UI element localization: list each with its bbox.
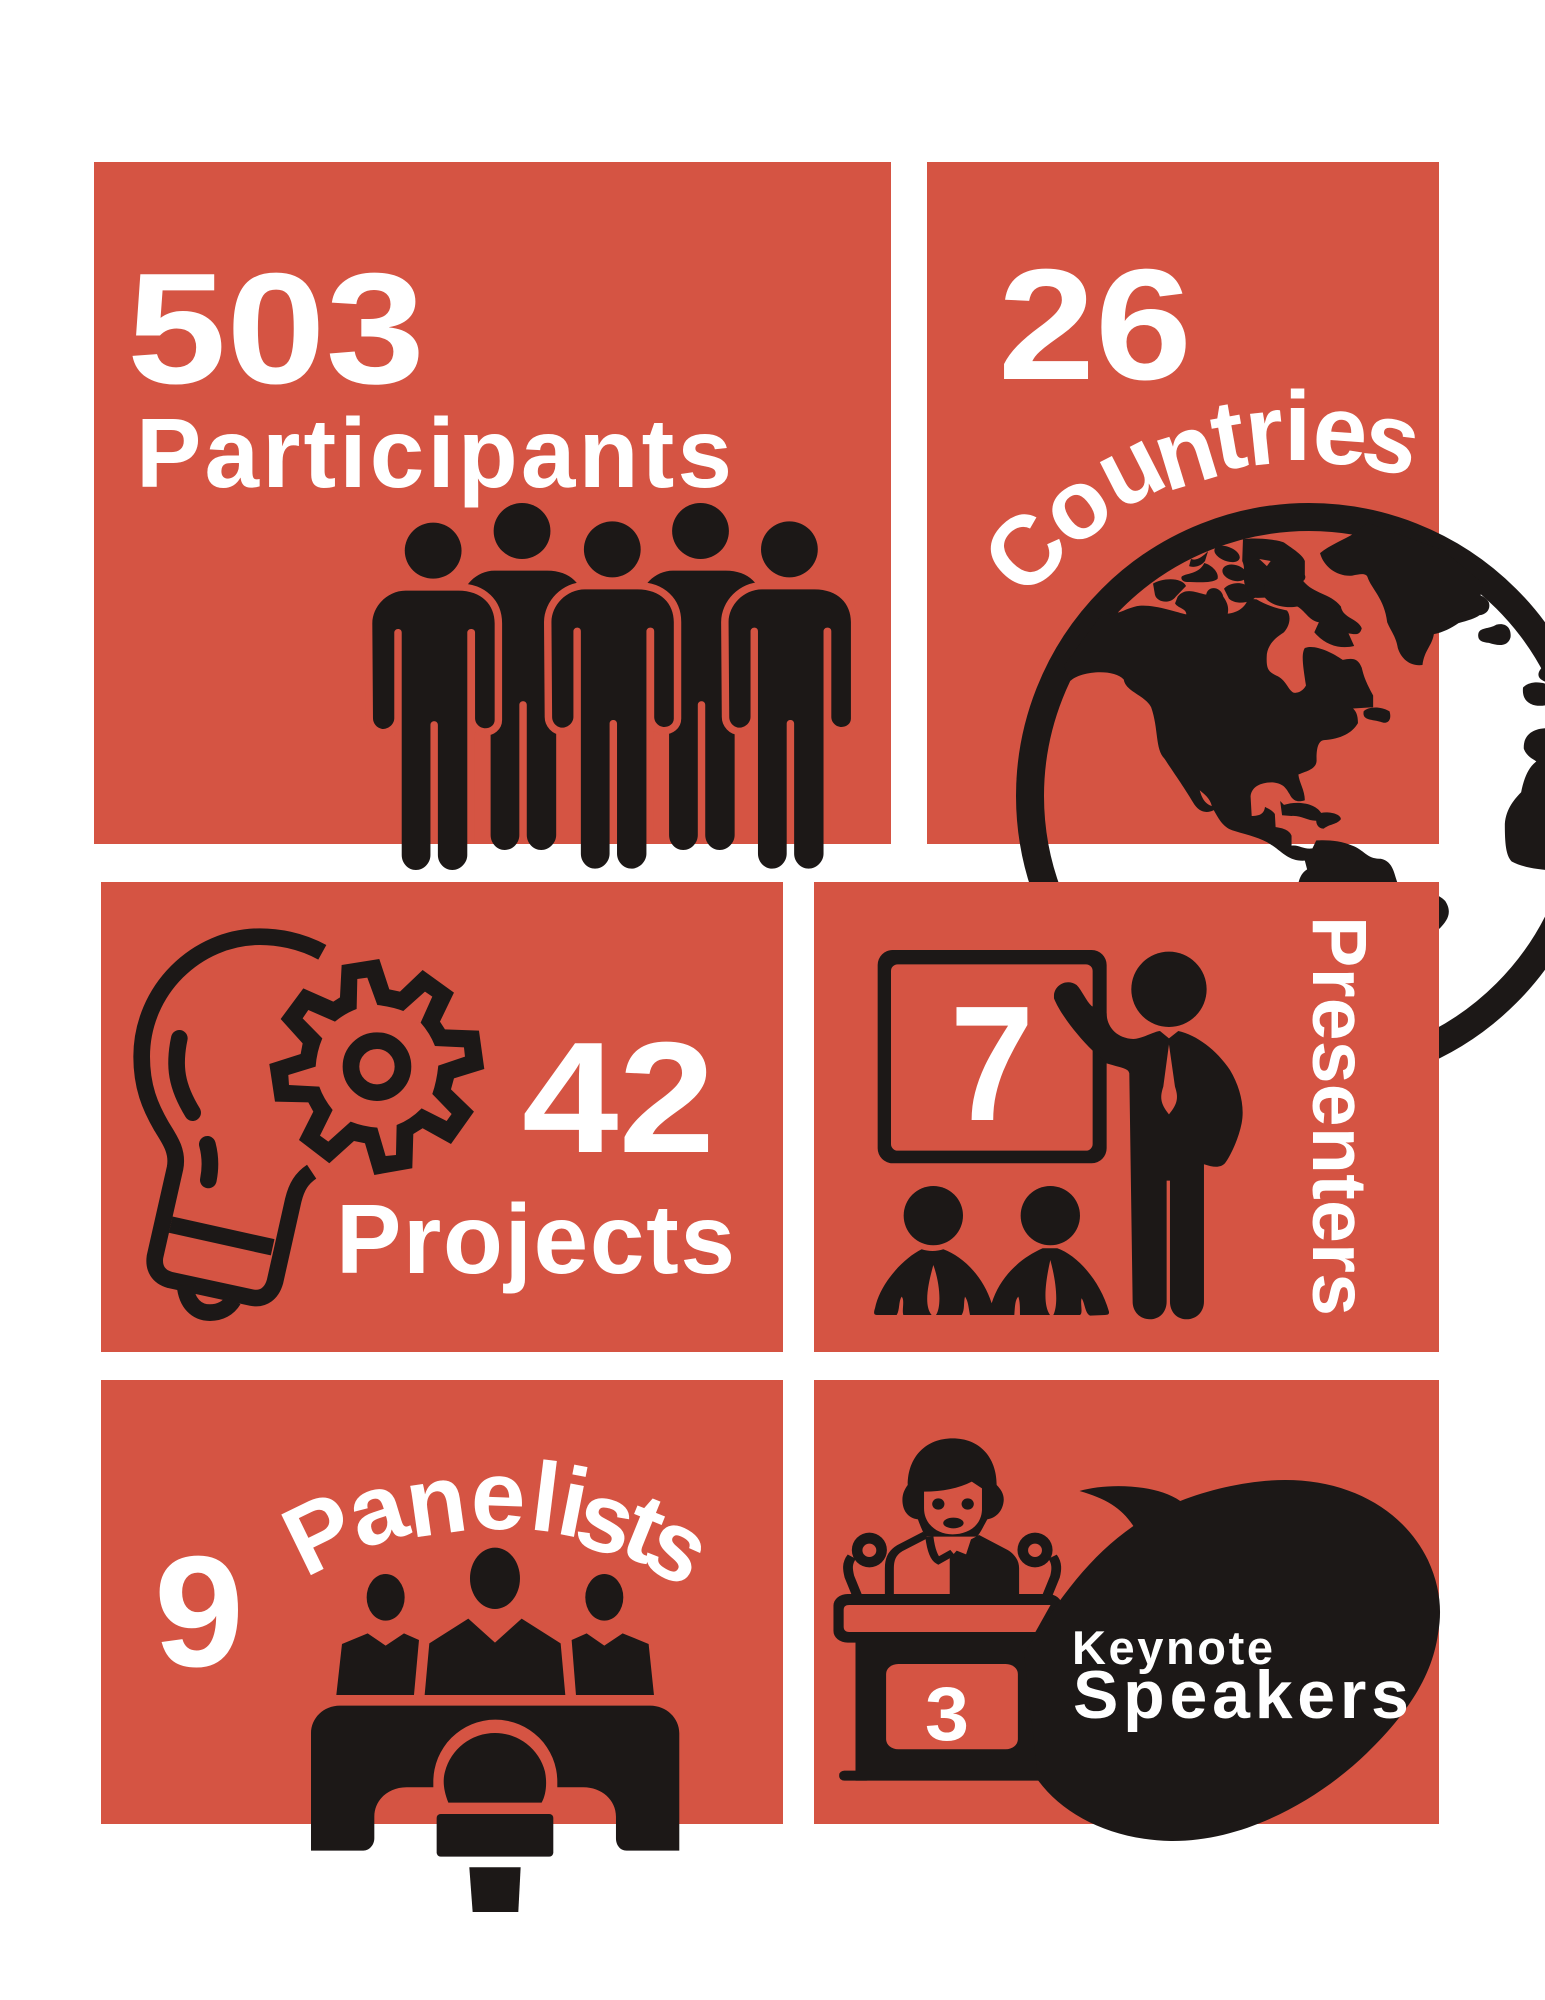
number: 3: 3	[925, 1672, 969, 1757]
icon: speaker at podium with speech bubble	[833, 1438, 1440, 1841]
panel: projects	[101, 882, 783, 1352]
number: 503: 503	[127, 241, 425, 417]
panel: presenters	[814, 882, 1439, 1352]
label: Countries on an arc: Countries	[961, 371, 1431, 615]
number: 7: 7	[950, 972, 1034, 1155]
label: Speakers: Speakers	[1073, 1657, 1409, 1733]
icon: group of people	[372, 503, 851, 870]
number: 9: 9	[154, 1524, 244, 1700]
icon: presenter with audience	[874, 950, 1243, 1319]
panel: countries	[927, 162, 1545, 1075]
label: Presenters rotated: Presenters	[1296, 916, 1382, 1316]
panel: participants	[94, 162, 891, 870]
icon: globe	[1030, 517, 1545, 1075]
number: 26: 26	[998, 237, 1192, 413]
label: Keynote: Keynote	[1072, 1621, 1273, 1674]
icon: light bulb with gear	[142, 937, 484, 1313]
panel: panelists	[101, 1380, 783, 1912]
number: 42: 42	[522, 1010, 715, 1186]
label: Projects: Projects	[336, 1184, 735, 1294]
icon: panel table with microphone	[311, 1548, 679, 1912]
label: Panelists on an arc: Panelists	[266, 1439, 730, 1607]
label: Participants: Participants	[136, 398, 732, 508]
panel: keynote speakers	[814, 1380, 1440, 1841]
